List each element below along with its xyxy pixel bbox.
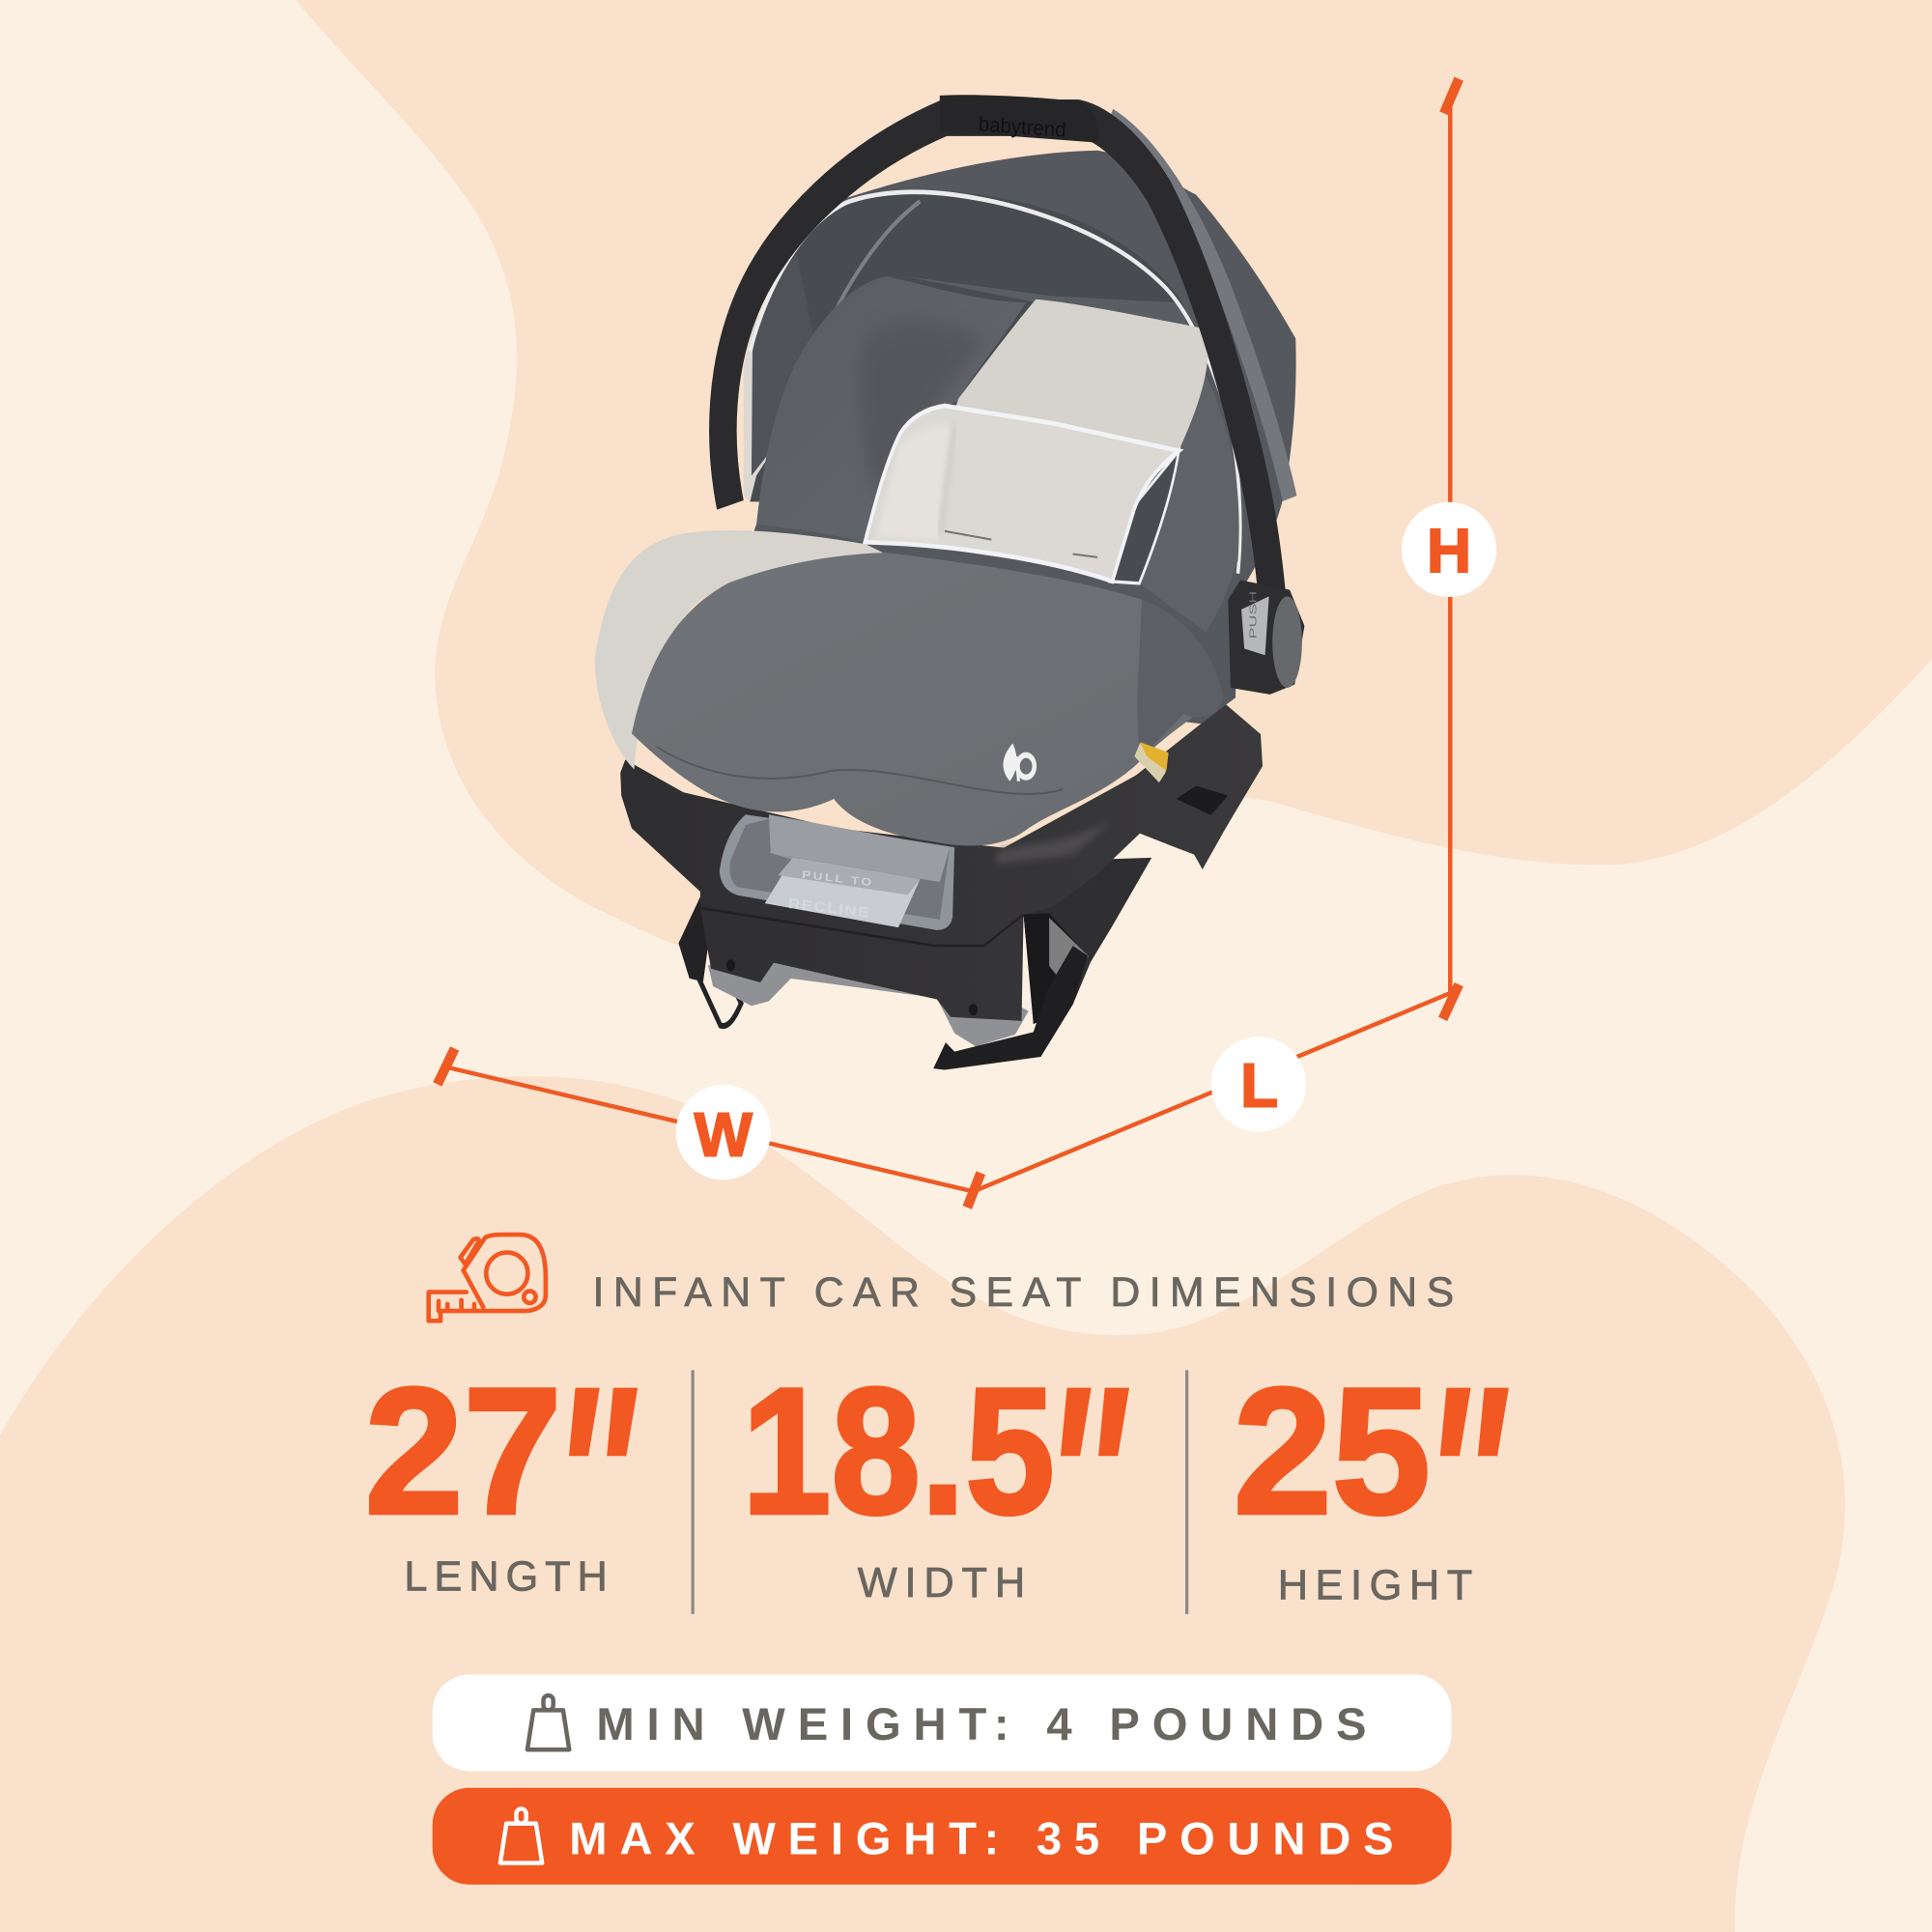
padding shade [859,322,984,496]
footmuff dark panel [632,553,1223,846]
base highlight [997,822,1112,865]
background blob: bottom [0,1076,1845,1932]
right clip strap [933,946,1088,1070]
seat base [620,704,1263,1070]
base groove [700,908,1024,946]
footmuff light panel [595,530,886,770]
canopy band [905,276,1196,338]
icon: weight [500,1808,542,1863]
dimension: height: 25 [1234,1350,1431,1551]
main shell [620,704,1263,1021]
grey foot [708,952,1029,1046]
seat padding left [756,276,1026,542]
recline handle [765,858,920,927]
max weight pill: MAX WEIGHT: 35 POUNDS [569,1814,1394,1865]
seat base: RECLINE [787,896,870,921]
dimension: height: " [1421,1329,1509,1634]
title: dimensions heading: INFANT CAR SEAT DIMENSIONS [593,1269,1454,1316]
dimension lines [438,79,1459,1208]
lower right body [1024,858,1151,1017]
handle brand text: babytrend [978,113,1066,142]
handle hub: PUSH [1248,591,1259,639]
background blob: top [296,0,1932,974]
icon: tape measure [429,1235,546,1321]
dimension: width: 18.5 [742,1350,1055,1551]
clip [1049,918,1089,982]
seat padding right [1139,375,1239,633]
inner canopy seam [811,201,920,364]
car seat product illustration [595,95,1304,1070]
canopy interior [750,191,1210,501]
handle grip [940,95,1098,143]
canopy back [837,151,1296,626]
warning label [1134,744,1169,782]
icon: weight [527,1695,569,1749]
marker H: H [1427,516,1471,585]
seat backing fill [708,522,1238,724]
body insert [865,406,1179,583]
carry handle [723,118,1272,600]
canopy piping [750,192,1240,574]
min weight pill: MIN WEIGHT: 4 POUNDS [596,1699,1367,1750]
dimension: width: " [1041,1329,1129,1634]
dimension: height: HEIGHT [1278,1563,1472,1609]
carry handle grey inlay [1110,118,1290,498]
dimension: width: WIDTH [858,1560,1025,1606]
dimension: length: 27 [365,1350,562,1551]
cup holder [1177,785,1228,815]
max weight pill [433,1788,1452,1885]
screws [726,959,735,971]
dimension: length [365,1329,638,1634]
left strap [678,896,708,981]
marker W [676,1085,771,1179]
recline handle text: PULL TO [802,868,874,889]
handle hub [1228,581,1304,695]
canopy fold [744,312,773,501]
marker W: W [695,1099,753,1169]
footmuff stitching [656,747,1063,794]
min weight pill [433,1674,1452,1772]
footmuff pucker right [1137,600,1223,759]
marker L: L [1240,1050,1278,1120]
divider [692,1370,695,1614]
dimension: length: " [550,1329,638,1634]
dimension: width [742,1329,1129,1634]
recline tray [720,814,954,930]
divider [1185,1370,1188,1614]
marker L [1211,1037,1306,1132]
footmuff logo [1003,744,1035,781]
dimension: length: LENGTH [404,1554,608,1601]
dimension: height [1234,1329,1509,1634]
marker H [1402,502,1496,597]
headrest [954,299,1208,451]
